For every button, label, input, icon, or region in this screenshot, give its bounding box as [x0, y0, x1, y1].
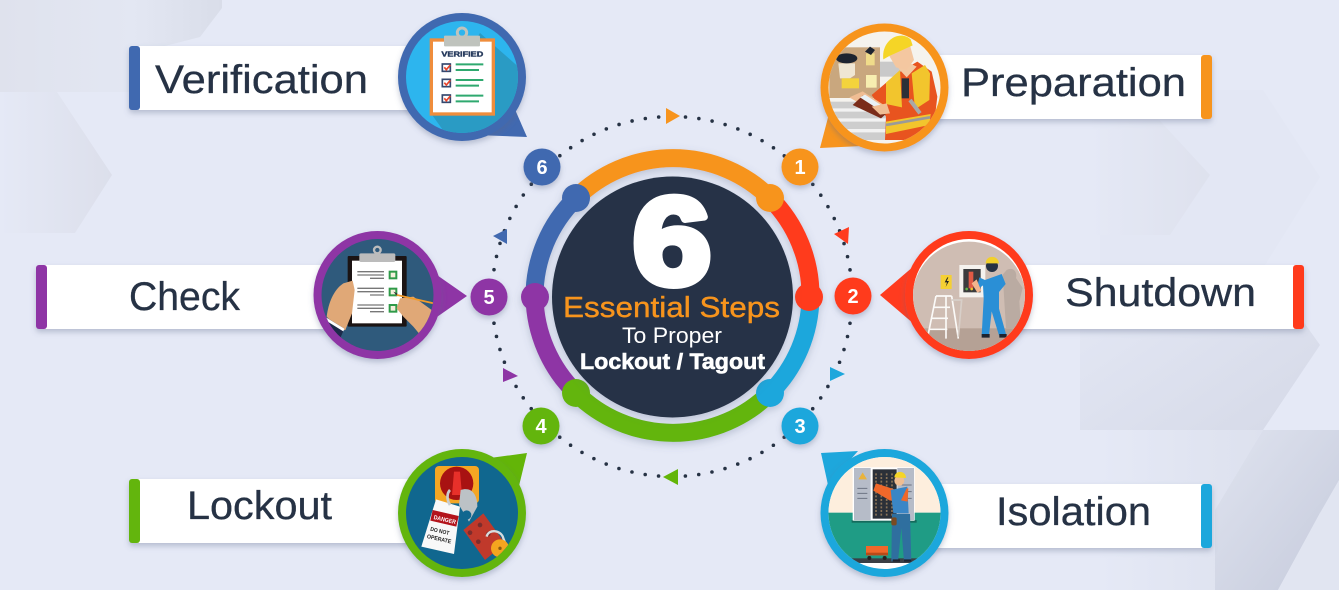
label bar: Verification [129, 46, 422, 110]
big number 6: 6 [633, 173, 711, 311]
number badge 5 [470, 278, 508, 316]
step: Lockout [129, 449, 527, 577]
speech bubble: clipboard verified [398, 13, 527, 141]
speech bubble: worker at switch panel [880, 231, 1033, 359]
speech bubble: worker at electrical cabinet [820, 449, 948, 577]
number badge 6: 6 [536, 157, 548, 179]
number badge 2 [834, 278, 872, 314]
label bar: Lockout: Lockout [187, 484, 332, 528]
speech bubble: danger tag and padlock: OPERATE [426, 534, 452, 546]
center ring: six coloured arcs [521, 158, 823, 433]
number badge 6 [524, 148, 560, 186]
number badge 1 [782, 148, 818, 186]
label bar: Shutdown [1010, 265, 1304, 329]
step: Check [36, 231, 467, 359]
number badge 4 [522, 408, 560, 444]
speech bubble: clipboard verified: VERIFIED [441, 50, 484, 59]
label bar: Lockout [129, 479, 422, 543]
label bar: Isolation [925, 484, 1212, 548]
number badge 3: 3 [794, 416, 806, 438]
number badge 1: 1 [794, 157, 806, 179]
number badge 3 [782, 408, 818, 444]
dotted orbit ring [492, 116, 852, 476]
number badge 5: 5 [483, 287, 495, 309]
subheading: Lockout / Tagout: Lockout / Tagout [580, 349, 766, 374]
heading: Essential Steps: Essential Steps [563, 292, 780, 324]
step: Isolation [820, 449, 1212, 577]
speech bubble: hands ticking a clipboard [314, 231, 467, 359]
center dark disc with title [552, 173, 793, 418]
speech bubble: danger tag and padlock [398, 449, 527, 577]
label bar: Preparation: Preparation [961, 61, 1186, 105]
label bar: Verification: Verification [155, 58, 368, 102]
subheading: To Proper: To Proper [622, 323, 722, 348]
number badge 4: 4 [535, 416, 547, 438]
label bar: Preparation [925, 55, 1212, 119]
speech bubble: danger tag and padlock: DANGER [433, 515, 457, 526]
label bar: Check [36, 265, 329, 329]
speech bubble: danger tag and padlock: DO NOT [430, 527, 450, 537]
step: Shutdown [880, 231, 1304, 359]
orbit arrowheads [493, 108, 849, 485]
step: Preparation [820, 24, 1212, 152]
step: Verification [129, 13, 527, 141]
label bar: Check: Check [129, 275, 241, 319]
speech bubble: worker with tablet [820, 24, 948, 152]
label bar: Isolation: Isolation [996, 490, 1151, 534]
label bar: Shutdown: Shutdown [1065, 271, 1256, 315]
number badge 2: 2 [847, 286, 859, 308]
